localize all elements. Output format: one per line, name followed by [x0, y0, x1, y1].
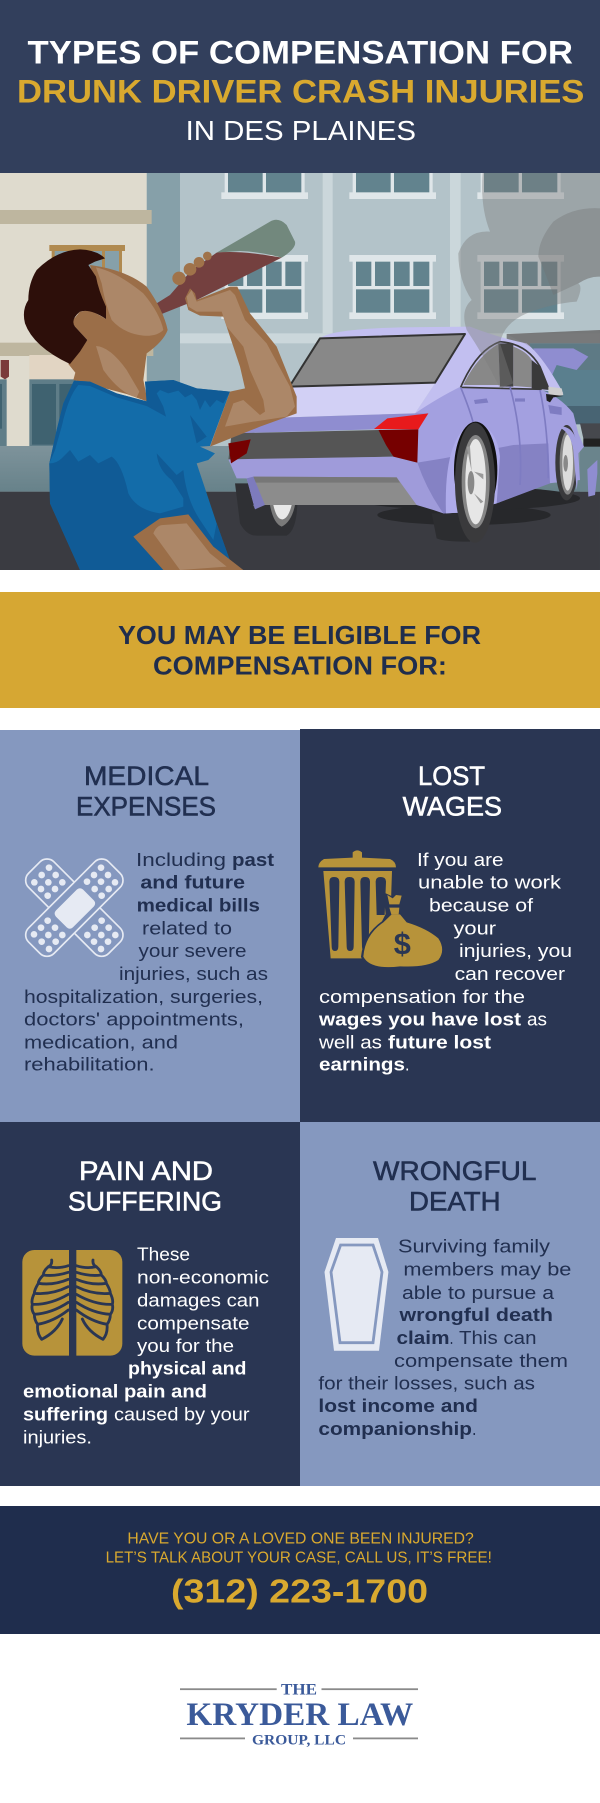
eligibility banner	[0, 592, 600, 708]
body text: medical expenses	[24, 849, 274, 1075]
phone number: (312) 223-1700	[171, 1573, 428, 1610]
body text: wrongful death: able to pursue a	[402, 1282, 555, 1303]
body text: pain and suffering: These	[137, 1244, 190, 1265]
body text: wrongful death: claim	[396, 1327, 450, 1348]
icon: trash can and money bag: $	[394, 927, 411, 961]
heading: medical expenses: MEDICAL	[84, 761, 209, 791]
body text: wrongful death: for their losses, such as	[318, 1373, 535, 1394]
body text: lost wages: If you are	[417, 849, 504, 870]
body text: pain and suffering: injuries.	[23, 1427, 92, 1448]
title line 3: IN DES PLAINES	[186, 115, 416, 146]
body text: wrongful death: lost income and	[318, 1395, 478, 1416]
title line 1: TYPES OF COMPENSATION FOR	[28, 35, 573, 71]
body text: lost wages: earnings	[319, 1054, 405, 1075]
heading: medical expenses	[76, 761, 216, 822]
body text: pain and suffering: you for the	[137, 1335, 234, 1356]
icon: trash can and money bag	[318, 850, 442, 968]
body text: pain and suffering: emotional pain and	[23, 1381, 207, 1402]
icon: bottle	[154, 220, 295, 316]
body text: medical expenses: doctors' appointments,	[24, 1009, 244, 1030]
body text: pain and suffering	[23, 1244, 269, 1448]
logo: The Kryder Law Group, LLC: THE	[281, 1682, 317, 1699]
cta text	[106, 1530, 492, 1566]
call to action footer	[0, 1506, 600, 1634]
body text: lost wages: unable to work	[418, 872, 562, 893]
smoke	[458, 173, 600, 388]
icon: coffin	[324, 1238, 388, 1351]
body text: wrongful death: wrongful death	[398, 1304, 553, 1325]
panel: lost wages	[300, 729, 600, 1122]
body text: wrongful death: compensate them	[394, 1350, 568, 1371]
heading: lost wages: WAGES	[403, 792, 502, 822]
crashed lilac car	[228, 327, 600, 543]
arm	[172, 252, 297, 447]
body text: lost wages: can recover	[455, 963, 565, 984]
body text: lost wages: as	[527, 1009, 547, 1030]
shirt	[49, 380, 233, 570]
body text: wrongful death	[318, 1236, 571, 1439]
heading: medical expenses: EXPENSES	[76, 792, 216, 822]
logo: The Kryder Law Group, LLC	[180, 1682, 418, 1748]
body text: medical expenses: Including	[136, 849, 226, 870]
street background	[0, 170, 600, 570]
body text: medical expenses: related to	[142, 918, 232, 939]
man drinking from bottle	[24, 220, 297, 570]
heading: pain and suffering	[68, 1156, 222, 1217]
body text: lost wages: .	[405, 1054, 410, 1075]
body text: medical expenses: hospitalization, surgeries,	[24, 986, 263, 1007]
body text: lost wages: wages you have lost	[318, 1009, 521, 1030]
body text: medical expenses: medication, and	[24, 1032, 178, 1053]
heading: pain and suffering: SUFFERING	[68, 1187, 222, 1217]
body text: pain and suffering: physical and	[128, 1358, 246, 1379]
body text: wrongful death: .	[472, 1418, 476, 1439]
panel: medical expenses	[0, 730, 300, 1122]
body text: medical expenses: injuries, such as	[119, 963, 268, 984]
body text: lost wages	[318, 849, 572, 1075]
body text: lost wages: because of	[429, 895, 534, 916]
heading: lost wages	[403, 761, 502, 822]
cta text: LET’S TALK ABOUT YOUR CASE, CALL US, IT’S FREE!	[106, 1549, 492, 1566]
icon: rib cage	[22, 1248, 122, 1357]
body text: medical expenses: your severe	[138, 940, 246, 961]
heading: pain and suffering: PAIN AND	[79, 1156, 213, 1186]
body text: medical expenses: and future	[140, 872, 245, 893]
body text: medical expenses: medical bills	[137, 895, 260, 916]
panel: wrongful death	[300, 1122, 600, 1486]
body text: lost wages: your	[454, 918, 496, 939]
body text: lost wages: compensation for the	[319, 986, 525, 1007]
banner text: COMPENSATION FOR:	[153, 651, 447, 681]
body text: pain and suffering: non-economic	[137, 1267, 269, 1288]
body text: lost wages: well as	[318, 1032, 382, 1053]
logo: The Kryder Law Group, LLC: KRYDER LAW	[186, 1697, 413, 1733]
cta text: HAVE YOU OR A LOVED ONE BEEN INJURED?	[127, 1530, 474, 1547]
body text: wrongful death: companionship	[318, 1418, 472, 1439]
body text: pain and suffering: compensate	[137, 1313, 250, 1334]
title line 2: DRUNK DRIVER CRASH INJURIES	[17, 73, 584, 109]
banner text	[118, 620, 481, 681]
heading: wrongful death	[373, 1156, 536, 1217]
body text: medical expenses: rehabilitation.	[24, 1054, 155, 1075]
hero illustration: man drinking beside crashed car	[0, 170, 600, 570]
heading: lost wages: LOST	[418, 761, 485, 791]
logo: The Kryder Law Group, LLC: GROUP, LLC	[252, 1732, 346, 1748]
heading: wrongful death: WRONGFUL	[373, 1156, 536, 1186]
body text: pain and suffering: suffering	[23, 1404, 108, 1425]
body text: wrongful death: This can	[459, 1327, 536, 1348]
body text: wrongful death: .	[450, 1327, 454, 1348]
body text: lost wages: future lost	[388, 1032, 491, 1053]
body text: wrongful death: Surviving family	[398, 1236, 551, 1257]
banner text: YOU MAY BE ELIGIBLE FOR	[118, 620, 481, 650]
body text: lost wages: injuries, you	[459, 940, 572, 961]
body text: medical expenses: past	[232, 849, 274, 870]
icon: crossed bandages	[22, 855, 127, 960]
body text: pain and suffering: damages can	[137, 1290, 260, 1311]
heading: wrongful death: DEATH	[409, 1187, 501, 1217]
body text: wrongful death: members may be	[403, 1259, 571, 1280]
body text: pain and suffering: caused by your	[114, 1404, 250, 1425]
panel: pain and suffering	[0, 1122, 300, 1486]
header banner	[0, 0, 600, 173]
